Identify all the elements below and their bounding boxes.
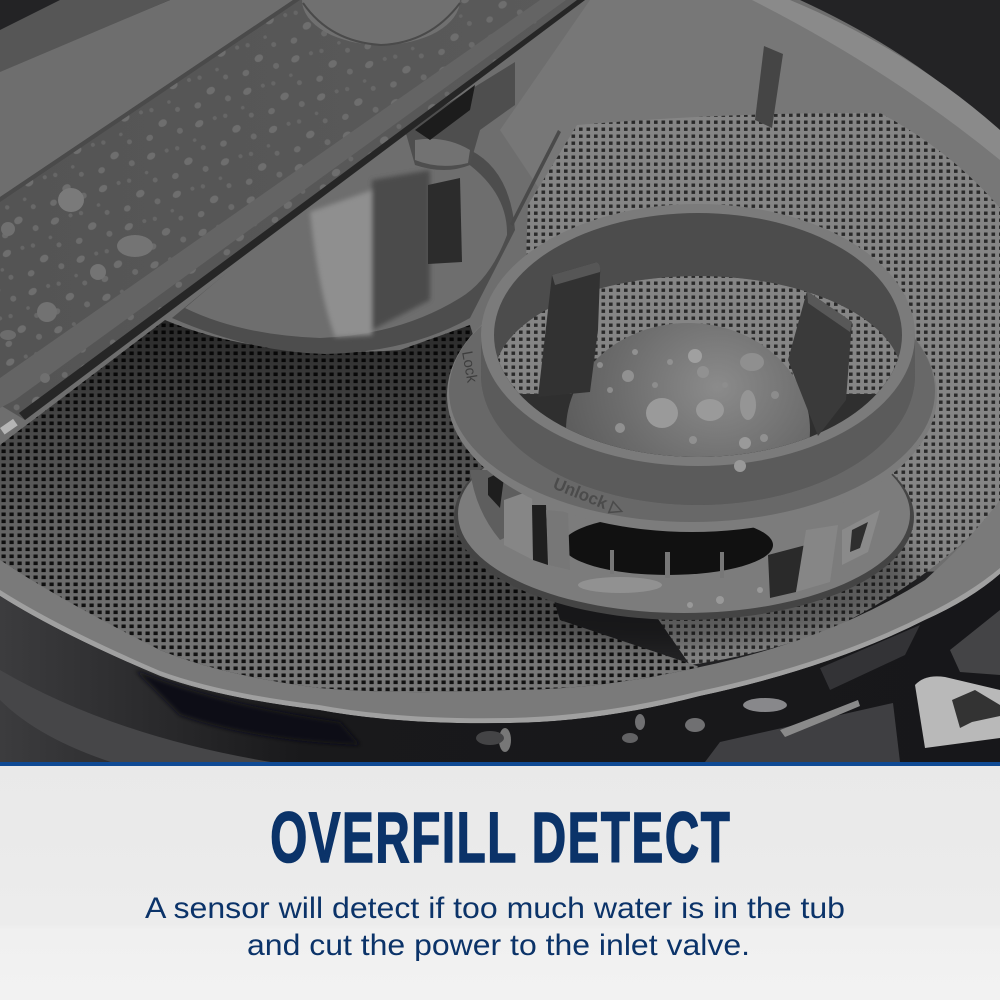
right tab bbox=[788, 291, 852, 436]
photo: dishwasher tub interior bbox=[0, 0, 1000, 765]
upper-left tub floor bbox=[0, 0, 1000, 593]
ring lip bbox=[481, 204, 915, 466]
dome droplets bbox=[646, 398, 678, 428]
arm fold highlight bbox=[0, 0, 566, 408]
view through the ring bbox=[498, 276, 898, 457]
spray arm bbox=[0, 0, 585, 435]
inner wall bbox=[494, 213, 902, 457]
description text: and cut the power to the inlet valve. bbox=[247, 929, 750, 962]
mesh filter: left bbox=[0, 320, 700, 692]
lower dark wet trough bbox=[0, 574, 1000, 765]
left tab bbox=[538, 262, 600, 397]
top ring with dome bbox=[481, 204, 915, 505]
outer rim bbox=[0, 500, 1000, 720]
upper-right floor bbox=[500, 0, 1000, 300]
embossed label: unlock: Unlock ▷ bbox=[551, 474, 628, 520]
ring outer band bbox=[481, 335, 915, 505]
information band bbox=[0, 762, 1000, 1000]
title: OVERFILL DETECT bbox=[270, 797, 730, 877]
description text bbox=[145, 892, 845, 962]
large droplets bbox=[58, 188, 84, 212]
peg bbox=[755, 46, 783, 128]
filter cage bbox=[454, 414, 914, 620]
puck bbox=[302, 0, 460, 45]
lower locking ring bbox=[447, 258, 937, 532]
embossed label: lock: Lock bbox=[458, 350, 480, 384]
central hub bbox=[172, 130, 515, 354]
dome bbox=[566, 323, 810, 457]
wet droplets bbox=[0, 0, 585, 420]
shadow around filter cage bbox=[385, 505, 915, 645]
mesh filter: right bbox=[520, 113, 1000, 665]
description text: A sensor will detect if too much water is in the tub bbox=[145, 892, 845, 925]
